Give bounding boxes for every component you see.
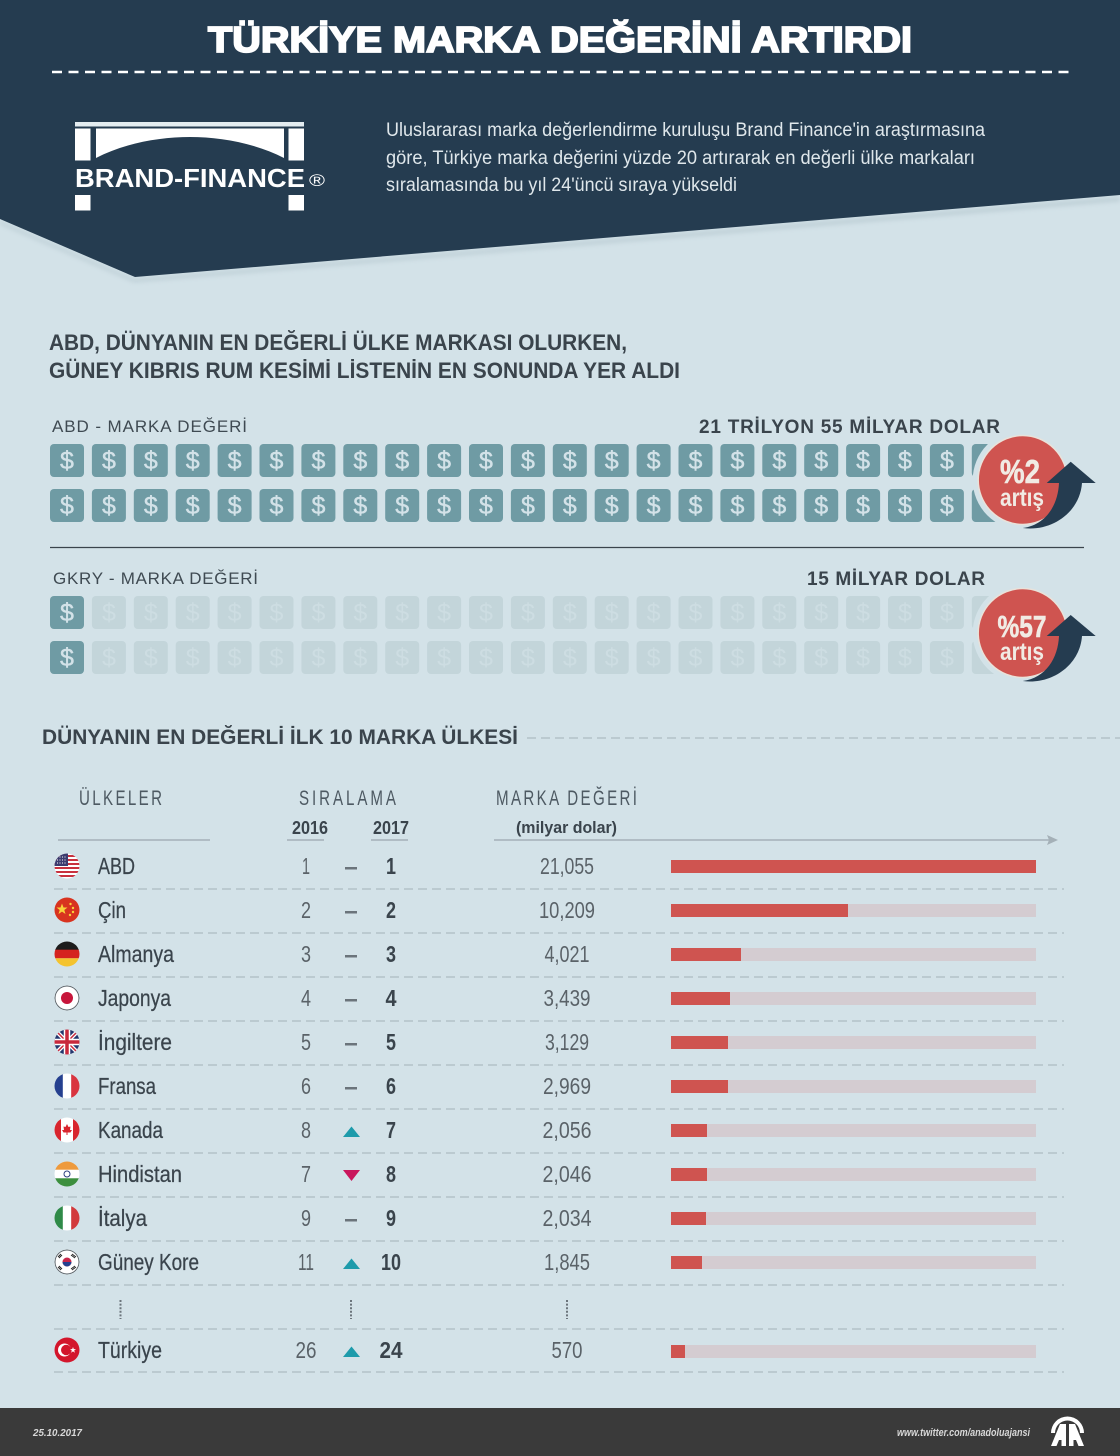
header band	[0, 0, 1120, 282]
row: ABD: 21,055	[540, 853, 594, 879]
arrow: rank up	[343, 1126, 360, 1137]
arrow: rank up	[343, 1258, 360, 1269]
pictogram: ABD dollars	[50, 444, 1006, 522]
row: Güney Kore	[54, 1249, 1036, 1275]
row: Güney Kore: 1,845	[544, 1249, 590, 1275]
row: Hindistan: Hindistan	[98, 1161, 182, 1187]
title: TÜRKİYE MARKA DEĞERİNİ ARTIRDI	[208, 19, 912, 60]
value: GKRY: 15 MİLYAR DOLAR	[807, 569, 985, 590]
row: Çin: Çin	[98, 897, 126, 923]
row: İngiltere: İngiltere	[98, 1029, 172, 1055]
row: Fransa: Fransa	[98, 1073, 156, 1099]
arrow: rank down	[343, 1170, 360, 1181]
flag: China	[54, 897, 80, 923]
row: Hindistan	[54, 1161, 1036, 1187]
row: İngiltere: 3,129	[545, 1029, 589, 1055]
flag: Germany	[54, 941, 80, 967]
flag: Canada	[54, 1117, 80, 1143]
row: Fransa: 2,969	[543, 1073, 591, 1099]
row: Güney Kore: Güney Kore	[98, 1249, 199, 1275]
flag: South Korea	[54, 1249, 80, 1275]
table headers	[58, 785, 1058, 845]
row: Kanada: Kanada	[98, 1117, 163, 1143]
label: GKRY brand value: GKRY - MARKA DEĞERİ	[53, 569, 258, 588]
row: Türkiye	[54, 1337, 1036, 1363]
row: Japonya: 4	[301, 985, 311, 1011]
row: Fransa	[54, 1073, 1036, 1099]
value: ABD: 21 TRİLYON 55 MİLYAR DOLAR	[699, 417, 1000, 438]
pictogram: GKRY dollars	[50, 596, 1006, 674]
row: Türkiye: 26	[296, 1337, 316, 1363]
badge: %2 increase: artış	[1000, 484, 1044, 512]
pictogram: GKRY dollars: $$$$$$$$$$$$$$$$$$$$$	[102, 644, 954, 672]
row: Çin: 10,209	[539, 897, 595, 923]
row: Çin: 2	[386, 897, 396, 923]
logo: Anadolu Agency	[1051, 1417, 1084, 1446]
row: Kanada: 7	[386, 1117, 396, 1143]
row: Japonya: 4	[386, 985, 397, 1011]
badge: %2 increase: %2	[1000, 453, 1040, 490]
arrow: rank up	[343, 1346, 360, 1357]
row: ABD	[54, 853, 1036, 879]
intro text: göre, Türkiye marka değerini yüzde 20 artırarak en değerli ülke markaları	[386, 148, 975, 169]
row: Türkiye: Türkiye	[98, 1337, 162, 1363]
flag: Japan	[54, 985, 80, 1011]
row: İtalya: 9	[386, 1205, 396, 1231]
badge: %57 increase: %57	[998, 609, 1046, 644]
badge: %57 increase	[973, 583, 1096, 683]
row: İngiltere	[54, 1029, 1036, 1055]
row: Almanya: 3	[386, 941, 396, 967]
badge: %2 increase	[973, 430, 1096, 530]
flag: USA	[54, 853, 80, 879]
row: Güney Kore: 11	[298, 1249, 314, 1275]
intro text: Uluslararası marka değerlendirme kuruluşu Brand Finance'in araştırmasına	[386, 120, 985, 141]
table headers: MARKA DEĞERİ	[496, 785, 637, 810]
logo: Brand Finance: ®	[309, 171, 326, 190]
row: Hindistan: 2,046	[542, 1161, 592, 1187]
section heading: brand value comparison: GÜNEY KIBRIS RUM KESİMİ LİSTENİN EN SONUNDA YER ALDI	[49, 358, 680, 383]
logo: Brand Finance	[75, 122, 326, 210]
row: ABD: 1	[386, 853, 396, 879]
table headers: ÜLKELER	[79, 785, 162, 810]
row: Güney Kore: 10	[381, 1249, 401, 1275]
row: Hindistan: 8	[386, 1161, 396, 1187]
table headers: 2016	[292, 818, 328, 838]
pictogram: ABD dollars: $$$$$$$$$$$$$$$$$$$$$$	[60, 447, 954, 475]
flag: Turkey	[54, 1337, 80, 1363]
row: İtalya: İtalya	[98, 1205, 147, 1231]
row: Kanada: 2,056	[542, 1117, 592, 1143]
table headers: (milyar dolar)	[516, 818, 617, 837]
section heading: top 10: DÜNYANIN EN DEĞERLİ İLK 10 MARKA ÜLKESİ	[42, 725, 518, 749]
row: Almanya: 3	[301, 941, 311, 967]
table headers: 2017	[373, 818, 409, 838]
row dividers	[54, 889, 1064, 1372]
row: İtalya: 9	[301, 1205, 311, 1231]
row: İtalya	[54, 1205, 1036, 1231]
row: ABD: ABD	[98, 853, 135, 879]
row: Almanya: 4,021	[544, 941, 590, 967]
row: Hindistan: 7	[301, 1161, 311, 1187]
pictogram: GKRY dollars: $$$$$$$$$$$$$$$$$$$$$	[102, 599, 954, 627]
row: İtalya: 2,034	[542, 1205, 592, 1231]
row: İngiltere: 5	[301, 1029, 311, 1055]
row: Almanya	[54, 941, 1036, 967]
arrow: up	[1023, 615, 1096, 682]
flag: India	[54, 1161, 80, 1187]
flag: UK	[54, 1029, 80, 1055]
row: Japonya	[54, 985, 1036, 1011]
footer: 25.10.2017	[32, 1427, 83, 1439]
row: Fransa: 6	[386, 1073, 396, 1099]
row: Fransa: 6	[301, 1073, 311, 1099]
row: Türkiye: 570	[552, 1337, 582, 1363]
row: Kanada	[54, 1117, 1036, 1143]
row: ABD: 1	[302, 853, 310, 879]
pictogram: GKRY dollars: $	[60, 644, 74, 672]
row: Japonya: Japonya	[98, 985, 171, 1011]
pictogram: ABD dollars: $$$$$$$$$$$$$$$$$$$$$$	[60, 492, 954, 520]
arrow: up	[1023, 462, 1096, 529]
section heading: brand value comparison: ABD, DÜNYANIN EN DEĞERLİ ÜLKE MARKASI OLURKEN,	[49, 330, 627, 355]
row: Kanada: 8	[301, 1117, 311, 1143]
pictogram: GKRY dollars: $	[60, 599, 74, 627]
row: Çin: 2	[301, 897, 311, 923]
logo: Brand Finance: BRAND-FINANCE	[75, 163, 305, 193]
intro text	[386, 120, 985, 196]
intro text: sıralamasında bu yıl 24'üncü sıraya yükseldi	[386, 175, 737, 196]
row: Çin	[54, 897, 1036, 923]
footer	[0, 1408, 1120, 1456]
ellipsis dots	[120, 1300, 567, 1319]
flag: Italy	[54, 1205, 80, 1231]
badge: %57 increase: artış	[1000, 638, 1044, 666]
label: ABD brand value: ABD - MARKA DEĞERİ	[52, 417, 247, 436]
row: Japonya: 3,439	[544, 985, 590, 1011]
flag: France	[54, 1073, 80, 1099]
table headers: SIRALAMA	[299, 785, 397, 810]
row: Türkiye: 24	[380, 1337, 403, 1363]
row: Almanya: Almanya	[98, 941, 174, 967]
section heading: brand value comparison	[49, 330, 680, 383]
row: İngiltere: 5	[386, 1029, 396, 1055]
footer: www.twitter.com/anadoluajansi	[897, 1427, 1031, 1439]
